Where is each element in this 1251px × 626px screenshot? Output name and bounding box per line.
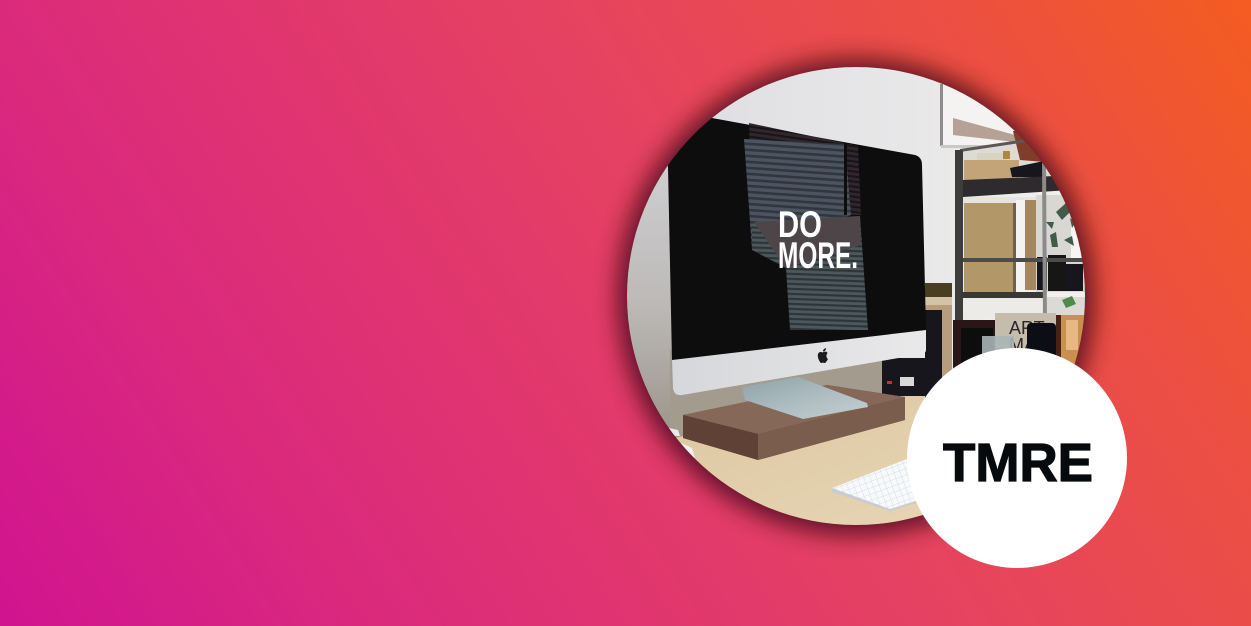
ART MA tote bag: ART — [1009, 318, 1045, 338]
monitor stand — [742, 377, 868, 419]
storage shelf — [955, 130, 1087, 325]
shelf notebook — [964, 203, 1015, 292]
screen text: DO MORE.: MORE. — [778, 235, 858, 276]
monitor — [660, 110, 926, 395]
screen text: DO MORE. — [780, 211, 856, 268]
white wall under shelf — [963, 197, 1043, 205]
lower wall behind desk — [670, 350, 882, 438]
keyboard — [832, 459, 925, 511]
ART MA tote bag: MA — [1009, 335, 1036, 355]
logo text: TMRE: TMRE — [943, 433, 1093, 493]
logo badge — [907, 348, 1127, 568]
wood monitor riser — [683, 385, 905, 460]
desk items at left — [669, 428, 680, 436]
desk surface — [676, 396, 925, 525]
screen window reflection — [744, 123, 868, 330]
icon: apple logo — [818, 348, 828, 363]
equipment box — [882, 358, 925, 396]
white circle — [907, 348, 1127, 568]
wall — [712, 67, 1062, 370]
camera lenses — [1037, 257, 1047, 290]
glass — [982, 336, 1014, 354]
desk objects behind monitor — [882, 283, 1086, 400]
black screen — [660, 110, 926, 360]
left wall in shade — [627, 166, 672, 428]
ART MA tote bag — [995, 313, 1056, 350]
silver chin — [672, 329, 926, 395]
photo drop shadow — [618, 59, 1094, 535]
plant leaves — [1046, 203, 1076, 247]
screen text: DO MORE.: DO — [778, 204, 822, 245]
phone — [1027, 323, 1056, 359]
wall behind right shelf — [1036, 195, 1087, 295]
wall picture — [940, 84, 1015, 148]
circular photo: desk with computer — [620, 60, 1100, 540]
